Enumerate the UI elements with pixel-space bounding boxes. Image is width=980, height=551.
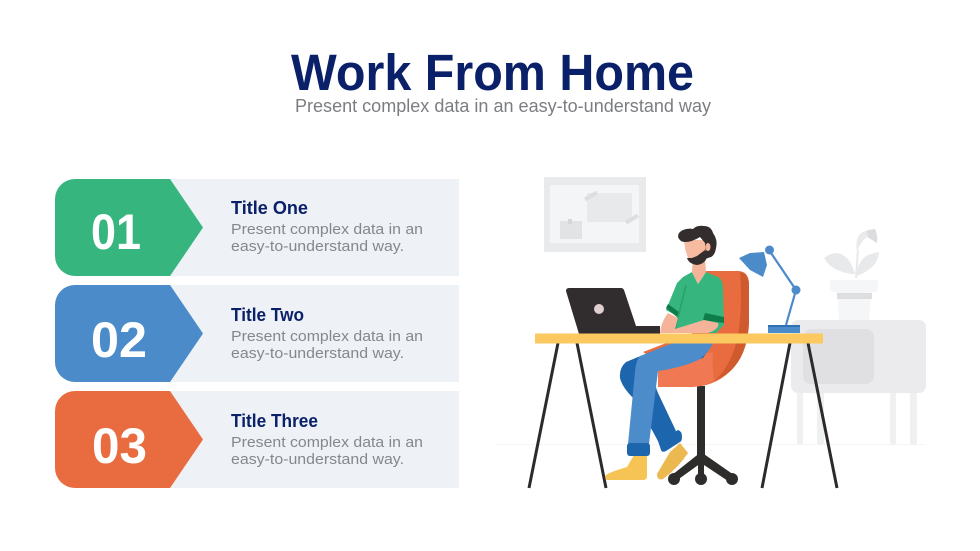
front leg <box>628 343 713 444</box>
sideboard <box>791 320 926 445</box>
body text: item three: Present complex data in an <box>231 434 423 451</box>
body text: item two: easy-to-understand way. <box>231 345 404 362</box>
chair <box>643 271 749 485</box>
shirt <box>666 272 724 333</box>
arrow badge: 03 <box>55 391 203 488</box>
back cuff <box>658 430 682 452</box>
hair <box>678 226 717 259</box>
face <box>684 240 708 260</box>
body text: item three: easy-to-understand way. <box>231 451 404 468</box>
body text: item two: Present complex data in an <box>231 328 423 345</box>
back leg <box>620 343 713 443</box>
number: 02: 02 <box>91 312 147 368</box>
beard <box>687 250 707 265</box>
laptop <box>566 288 660 334</box>
panel: item three <box>55 391 459 488</box>
wall pinboard <box>544 177 646 252</box>
body text: item two <box>231 328 423 362</box>
arm <box>660 313 718 333</box>
desk top <box>535 334 823 344</box>
number: 01: 01 <box>91 204 141 260</box>
heading: title three: Title Three <box>231 410 318 431</box>
body text: item one: Present complex data in an <box>231 221 423 238</box>
front shoe <box>605 455 647 480</box>
back shoe <box>657 443 688 479</box>
subtitle: Present complex data in an easy-to-understand way <box>295 96 711 116</box>
potted plant <box>824 229 879 320</box>
arrow badge: 01 <box>55 179 203 276</box>
number: 03: 03 <box>92 418 147 474</box>
floor line <box>495 444 925 445</box>
neck <box>692 258 706 284</box>
heading: title one: Title One <box>231 197 308 218</box>
illustration: person working at desk <box>495 177 926 488</box>
body text: item one <box>231 221 423 255</box>
front cuff <box>627 443 650 456</box>
desk lamp <box>739 246 800 333</box>
title: Work From Home <box>291 44 694 101</box>
ear <box>706 243 710 251</box>
heading: title two: Title Two <box>231 304 304 325</box>
panel: item two <box>55 285 459 382</box>
person <box>605 226 724 480</box>
arrow badge: 02 <box>55 285 203 382</box>
body text: item three <box>231 434 423 468</box>
body text: item one: easy-to-understand way. <box>231 238 404 255</box>
panel: item one <box>55 179 459 276</box>
desk legs <box>529 343 837 488</box>
